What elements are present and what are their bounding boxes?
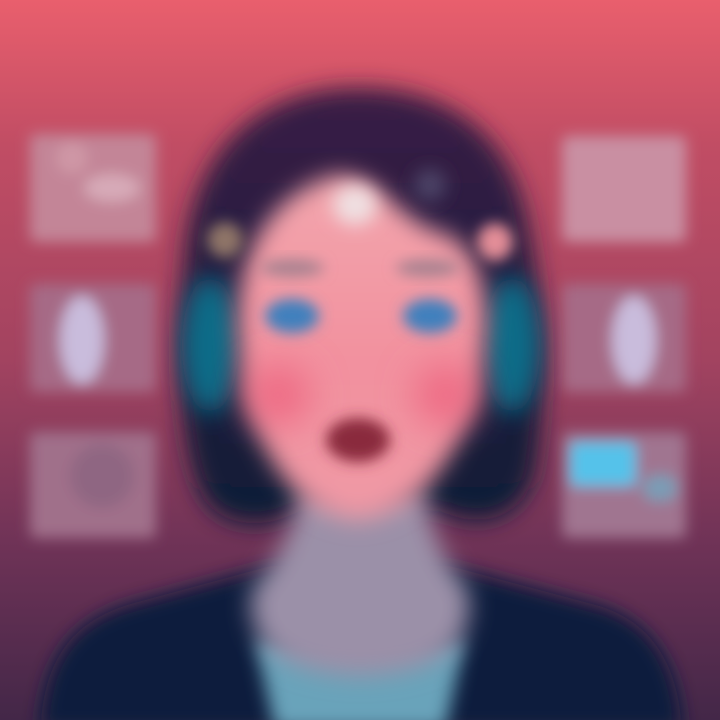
cheeks xyxy=(246,365,478,425)
shirt xyxy=(255,640,465,720)
mouth xyxy=(326,418,390,462)
jacket xyxy=(40,566,682,720)
panel: middle right xyxy=(562,284,686,392)
panel: left column xyxy=(30,134,156,538)
eyes xyxy=(265,299,457,333)
neck xyxy=(251,490,469,676)
panel: top left xyxy=(30,134,156,242)
panel: bottom left xyxy=(30,432,156,538)
hair clips xyxy=(207,222,513,261)
hair xyxy=(180,88,543,523)
eyebrows xyxy=(260,259,460,277)
panel: bottom right with blue highlight xyxy=(562,432,686,538)
face xyxy=(238,175,486,520)
hair highlight xyxy=(333,169,446,225)
panel: top right xyxy=(562,136,686,242)
panel: middle left xyxy=(30,284,156,392)
headphones xyxy=(182,277,540,413)
panel: right column xyxy=(562,136,686,538)
